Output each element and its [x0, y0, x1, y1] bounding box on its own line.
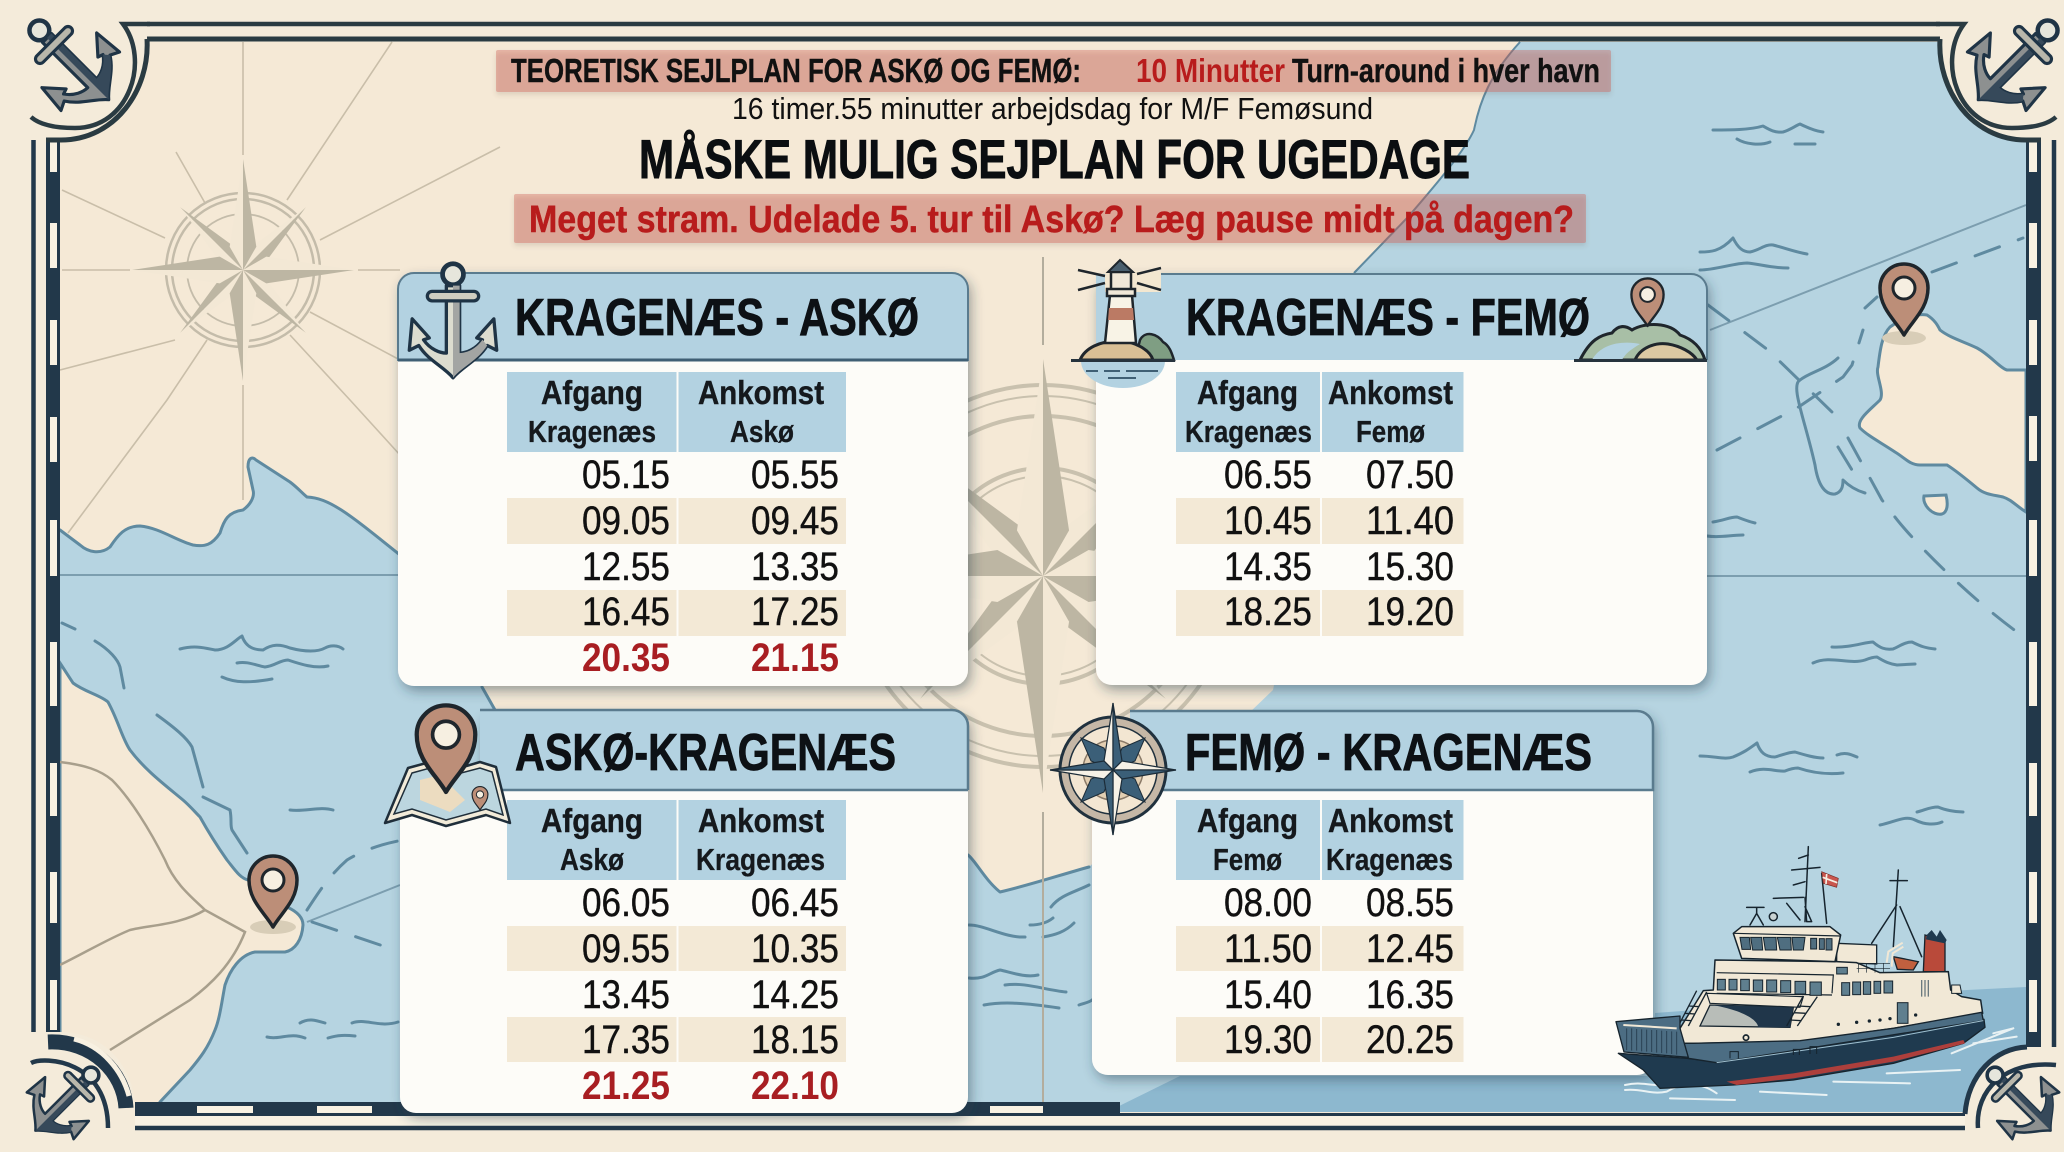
panel: Kragenæs - Askø: [398, 264, 968, 686]
timetable: 19.30: [1224, 1018, 1312, 1062]
timetable: 14.35: [1224, 545, 1312, 589]
timetable: 10.35: [751, 927, 839, 971]
timetable: 21.25: [582, 1064, 670, 1108]
main title: MÅSKE MULIG SEJPLAN FOR UGEDAGE: [639, 128, 1470, 190]
timetable: 06.05: [582, 881, 670, 925]
ferry M/F Femøsund: [1616, 847, 2017, 1100]
timetable: Ankomst: [1328, 802, 1453, 839]
corner ornament: bottom right anchor: [1965, 1046, 2064, 1152]
timetable: Kragenæs: [528, 414, 656, 449]
timetable: Femø: [1213, 842, 1282, 877]
timetable: Kragenæs: [1326, 842, 1453, 877]
timetable: 15.40: [1224, 973, 1312, 1017]
timetable: 07.50: [1366, 453, 1454, 497]
timetable: 11.50: [1224, 927, 1312, 971]
compass rose: centre watermark: [826, 257, 1260, 1102]
timetable: 12.55: [582, 545, 670, 589]
timetable: Askø: [560, 842, 624, 877]
timetable: Askø: [730, 414, 794, 449]
timetable: 05.55: [751, 453, 839, 497]
warning background: [514, 194, 1586, 243]
panel header: [1096, 274, 1707, 360]
icon: map with pin: [385, 705, 510, 826]
ferry bridge: [1733, 927, 1841, 962]
panel: Askø - Kragenæs: [385, 705, 968, 1113]
subtitle: 16 timer.55 minutter arbejdsdag for M/F Femøsund: [732, 91, 1373, 126]
warning text: Meget stram. Udelade 5. tur til Askø? Læg pause midt på dagen?: [529, 199, 1574, 241]
heading: KRAGENÆS - FEMØ: [1186, 289, 1590, 347]
map pin: Kragenæs: [249, 856, 297, 934]
timetable: 13.35: [751, 545, 839, 589]
timetable: 17.35: [582, 1018, 670, 1062]
timetable: [507, 800, 846, 1108]
icon: island with pin: [1574, 278, 1707, 360]
timetable: 17.25: [751, 590, 839, 634]
ferry funnel: [1923, 935, 1945, 972]
ferry car deck opening: [1700, 1005, 1793, 1027]
panel card: [1092, 711, 1653, 1075]
timetable: 09.55: [582, 927, 670, 971]
corner ornament: top right anchor: [1936, 0, 2064, 140]
ferry bow ramp: [1616, 1016, 1688, 1057]
panel card: [398, 273, 968, 686]
panel: Kragenæs - Femø: [1071, 260, 1707, 685]
panel card: [400, 710, 968, 1113]
warning banner: [514, 194, 1586, 243]
corner ornament: top left anchor: [0, 0, 150, 140]
panel card: [1096, 274, 1707, 685]
timetable: Ankomst: [698, 802, 824, 839]
map: road lines on land: [60, 762, 245, 1050]
corner ornament: bottom left anchor: [0, 1032, 135, 1152]
timetable: 08.55: [1366, 881, 1454, 925]
timetable: 09.45: [751, 499, 839, 543]
banner background: [496, 50, 1611, 92]
ferry hull: [1618, 1019, 1985, 1088]
timetable: [1176, 372, 1464, 636]
ferry masts: [1747, 847, 1922, 957]
timetable: 08.00: [1224, 881, 1312, 925]
banner text: TEORETISK SEJLPLAN FOR ASKØ OG FEMØ:: [511, 52, 1081, 89]
icon: compass: [1050, 703, 1176, 835]
panel: Femø - Kragenæs: [1050, 703, 1653, 1075]
banner highlight: 10 Minutter: [1136, 52, 1285, 89]
ferry rear deckhouse: [1837, 943, 1877, 964]
icon: anchor: [409, 264, 497, 378]
timetable: Ankomst: [698, 374, 824, 411]
timetable: Kragenæs: [1185, 414, 1312, 449]
compass rose: top left watermark: [60, 42, 500, 533]
timetable: 19.20: [1366, 590, 1454, 634]
timetable: Kragenæs: [696, 842, 825, 877]
heading: ASKØ-KRAGENÆS: [515, 724, 896, 782]
panel header: [398, 273, 968, 360]
timetable: 22.10: [751, 1064, 839, 1108]
panel header: [480, 710, 968, 790]
timetable: 06.45: [751, 881, 839, 925]
timetable: 18.25: [1224, 590, 1312, 634]
timetable: 06.55: [1224, 453, 1312, 497]
timetable: Afgang: [1197, 802, 1298, 839]
ferry flag: [1822, 872, 1838, 887]
ferry lifeboat: [1893, 957, 1918, 970]
timetable: Afgang: [1197, 374, 1298, 411]
timetable: 09.05: [582, 499, 670, 543]
timetable: 05.15: [582, 453, 670, 497]
timetable: 11.40: [1366, 499, 1454, 543]
timetable: 10.45: [1224, 499, 1312, 543]
timetable: 16.35: [1366, 973, 1454, 1017]
panel header: [1130, 711, 1653, 790]
heading: FEMØ - KRAGENÆS: [1185, 724, 1592, 782]
timetable: 16.45: [582, 590, 670, 634]
title banner: Teoretisk sejlplan: [496, 50, 1611, 92]
timetable: [507, 372, 846, 680]
map: waves: [62, 124, 1963, 1038]
heading: KRAGENÆS - ASKØ: [515, 289, 919, 347]
timetable: 15.30: [1366, 545, 1454, 589]
timetable: 20.35: [582, 636, 670, 680]
timetable: Afgang: [541, 802, 643, 839]
timetable: 18.15: [751, 1018, 839, 1062]
timetable: Afgang: [541, 374, 643, 411]
banner text continued: Turn-around i hver havn: [1292, 52, 1600, 89]
timetable: Femø: [1356, 414, 1425, 449]
timetable: 12.45: [1366, 927, 1454, 971]
timetable: 13.45: [582, 973, 670, 1017]
timetable: 21.15: [751, 636, 839, 680]
ferry wake: [1625, 1028, 2017, 1100]
timetable: 20.25: [1366, 1018, 1454, 1062]
map: grid lines and routes: [60, 205, 2026, 950]
map: darker shallows near ferry: [1107, 987, 2026, 1112]
icon: lighthouse: [1071, 260, 1175, 388]
timetable: Ankomst: [1328, 374, 1453, 411]
map pin: Femø harbour: [1880, 264, 1928, 345]
ferry superstructure: [1680, 960, 1983, 1043]
timetable: [1176, 800, 1464, 1062]
timetable: 14.25: [751, 973, 839, 1017]
